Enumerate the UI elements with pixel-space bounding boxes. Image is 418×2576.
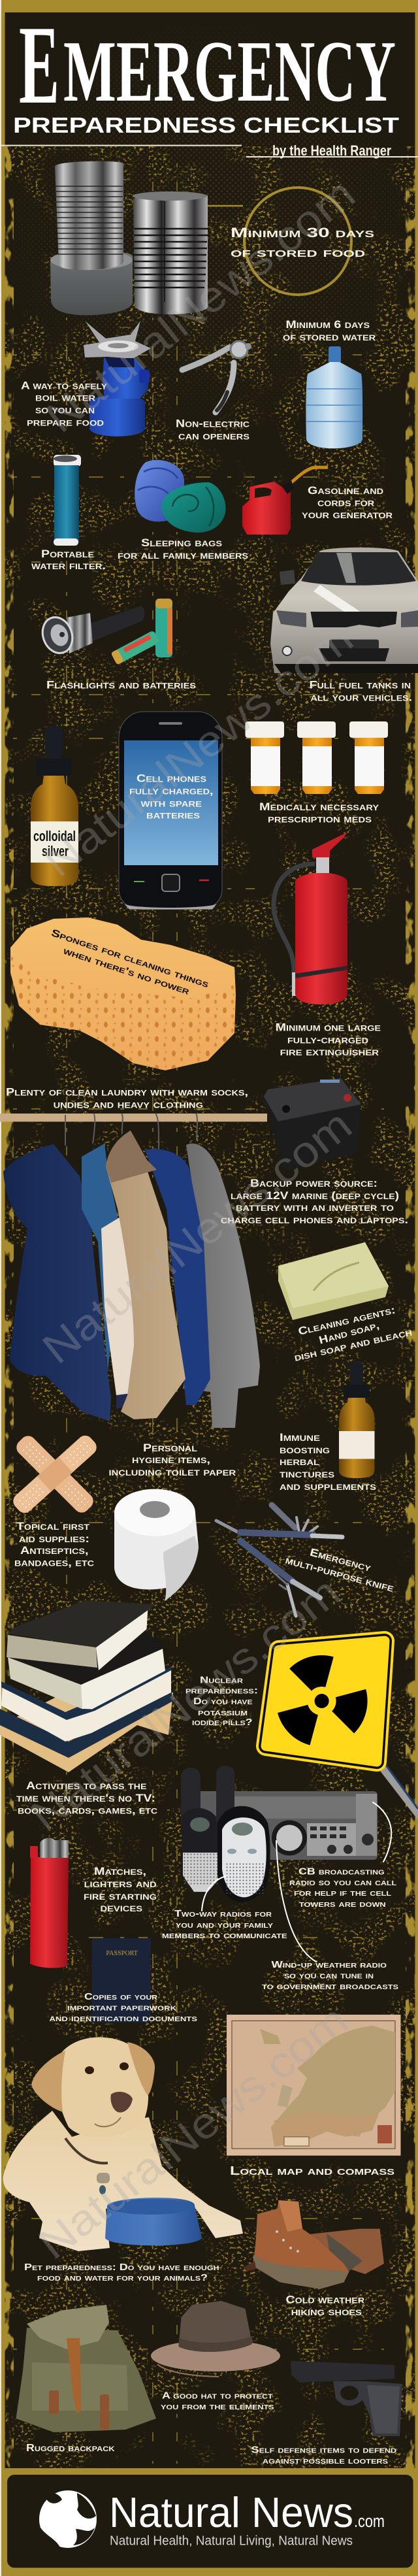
text: cleaning agents: dish soap and bleach xyxy=(293,1327,413,1364)
logo wordmark: .com xyxy=(354,2511,385,2531)
icon: can opener xyxy=(182,341,251,412)
subtitle: PREPAREDNESS CHECKLIST xyxy=(13,114,400,138)
text: wind-up radio: Wind-up weather radio xyxy=(272,1960,387,1970)
icon: sponge: when there's no power xyxy=(62,946,191,997)
text: prescription meds xyxy=(259,801,379,825)
title xyxy=(19,3,396,127)
text: multi-purpose knife: Emergency xyxy=(308,1546,372,1574)
icon: sponge xyxy=(10,917,236,1070)
text: sleeping bags: for all family members xyxy=(118,550,248,561)
icon: cell phone: fully charged, xyxy=(129,785,213,797)
arrow: radio callouts xyxy=(202,1802,391,1962)
text: hat xyxy=(161,2391,274,2412)
icon: car xyxy=(270,548,418,673)
watermark: NaturalNews.com xyxy=(37,169,364,442)
text: can openers: Non-electric xyxy=(176,418,249,430)
watermark: NaturalNews.com xyxy=(29,1995,357,2268)
text: first aid: Topical first xyxy=(16,1521,90,1532)
text: can openers: can openers xyxy=(178,431,249,442)
text: backpack: Rugged backpack xyxy=(26,2443,115,2454)
text: laundry xyxy=(6,1086,248,1110)
text: boil water xyxy=(21,380,107,429)
text: 6 days water: of stored water xyxy=(283,331,376,343)
text: pet preparedness: Pet preparedness: Do you have enough xyxy=(24,2262,219,2273)
byline: by the Health Ranger xyxy=(272,142,391,159)
text: two-way radios: Two-way radios for xyxy=(174,1909,272,1919)
text: fire extinguisher: Minimum one large xyxy=(276,1022,381,1034)
icon: bandages xyxy=(10,1432,100,1516)
text: matches: lighters and xyxy=(84,1878,157,1890)
text: multi-purpose knife: multi-purpose knife xyxy=(284,1554,395,1594)
text: immune xyxy=(280,1432,376,1493)
text: map and compass: Local map and compass xyxy=(230,2164,394,2177)
text: fuel tanks: all your vehicles. xyxy=(311,691,412,703)
text: wind-up radio xyxy=(262,1960,398,1992)
text: self defense: against possible looters xyxy=(263,2456,388,2466)
text: matches: devices xyxy=(101,1902,142,1914)
text: backup power: large 12V marine (deep cycle) xyxy=(231,1190,399,1202)
text: fuel tanks xyxy=(310,680,412,703)
icon: passport xyxy=(92,1938,151,2023)
icon: cell phone: with spare xyxy=(141,797,202,809)
text: hiking shoes xyxy=(286,2294,364,2318)
watermark: NaturalNews.com xyxy=(22,1567,349,1840)
text: nuclear xyxy=(185,1676,258,1728)
text: hat: you from the elements xyxy=(161,2402,274,2412)
icon: cell phone: Cell phones xyxy=(137,773,206,785)
text: cleaning agents xyxy=(293,1304,413,1364)
text: wind-up radio: so you can tune in xyxy=(284,1971,374,1981)
text: two-way radios: members to communicate xyxy=(162,1930,287,1941)
icon: cell phone: batteries xyxy=(146,810,200,821)
text: flashlights: Flashlights and batteries xyxy=(46,680,196,691)
icon: fire extinguisher xyxy=(274,833,347,1004)
text: CB radio: CB broadcasting xyxy=(298,1866,385,1877)
icon: dog with bowl xyxy=(3,2038,243,2251)
icon: batteries xyxy=(111,599,172,665)
icon: books xyxy=(0,1600,173,1772)
text: pet preparedness: food and water for your animals? xyxy=(37,2273,208,2283)
text: first aid xyxy=(14,1521,94,1569)
text: CB radio: radio so you can call xyxy=(289,1877,396,1888)
text: first aid: aid supplies: xyxy=(19,1533,89,1545)
icon: colloidal silver bottle: silver xyxy=(42,843,69,859)
text: activities xyxy=(16,1780,157,1817)
text: backup power: Backup power source: xyxy=(250,1178,378,1189)
text: documents: important paperwork xyxy=(67,2002,177,2013)
text: documents: Copies of your xyxy=(84,1992,158,2002)
text: hat: A good hat to protect xyxy=(162,2391,273,2402)
text: water filter: Portable xyxy=(41,548,94,560)
text: 6 days water xyxy=(283,319,376,343)
text: sleeping bags: Sleeping bags xyxy=(141,537,222,549)
text: hiking shoes: Cold weather xyxy=(286,2294,364,2305)
text: water filter: water filter. xyxy=(31,560,106,572)
text: hiking shoes: hiking shoes xyxy=(291,2306,362,2318)
text: 6 days water: Minimum 6 days xyxy=(286,319,370,331)
icon: map xyxy=(227,2015,401,2156)
icon: sleeping bags xyxy=(135,460,226,533)
text: 30 days food: of stored food xyxy=(231,244,365,260)
icon: CB radio xyxy=(195,1791,378,1860)
text: multi-purpose knife xyxy=(284,1546,395,1594)
text: immune: Immune xyxy=(280,1432,320,1444)
text: water filter xyxy=(31,548,106,572)
text: immune: boosting xyxy=(280,1444,330,1456)
text: two-way radios xyxy=(162,1909,287,1941)
icon: water filter xyxy=(54,455,81,546)
text: documents: and identification documents xyxy=(50,2013,197,2024)
icon: radiation sign xyxy=(266,1641,418,1820)
icon: two-way radios xyxy=(181,1766,270,1902)
text: prescription meds: Medically necessary xyxy=(259,801,379,813)
text: backup power: battery with an inverter to xyxy=(236,1202,394,1214)
text: nuclear: Nuclear xyxy=(200,1676,244,1686)
watermark: NaturalNews.com xyxy=(35,613,362,886)
text: fire extinguisher xyxy=(276,1022,381,1058)
text: 30 days food: Minimum 30 days xyxy=(231,225,374,240)
footer band xyxy=(1,2468,418,2576)
title: E xyxy=(19,3,59,127)
text: two-way radios: you and your family xyxy=(176,1920,273,1930)
icon: passport: PASSPORT xyxy=(106,1950,138,1957)
icon: water jug xyxy=(306,346,362,448)
text: fire extinguisher: fully-charged xyxy=(287,1034,368,1046)
text: documents xyxy=(50,1992,197,2024)
text: hygiene: hygiene items, xyxy=(132,1454,210,1466)
text: immune: and supplements xyxy=(280,1481,376,1493)
text: immune: herbal xyxy=(280,1456,319,1468)
text: boil water: boil water xyxy=(35,392,95,404)
icon: colloidal silver bottle xyxy=(31,725,78,886)
icon: coats on rack xyxy=(0,1114,267,1428)
text: hygiene xyxy=(108,1442,236,1478)
text: self defense: Self defense items to defend xyxy=(251,2445,396,2456)
text: nuclear: potassium xyxy=(198,1708,248,1718)
icon: lighter xyxy=(30,1838,69,1968)
icon: prescription bottles xyxy=(246,721,388,794)
text: matches: fire starting xyxy=(84,1891,157,1902)
text: activities: books, cards, games, etc xyxy=(18,1805,157,1817)
icon: tincture bottle xyxy=(339,1361,375,1478)
text: can openers xyxy=(176,418,249,442)
text: prescription meds: prescription meds xyxy=(268,813,372,825)
text: cleaning agents: Cleaning agents: xyxy=(297,1304,396,1338)
text: immune: tinctures xyxy=(280,1468,334,1480)
icon: camp stove xyxy=(84,321,151,437)
text: gasoline: Gasoline and xyxy=(308,485,383,497)
logo tagline: Natural Health, Natural Living, Natural News xyxy=(110,2534,353,2549)
text: CB radio: towers are down xyxy=(299,1899,386,1909)
icon: circle connector xyxy=(208,188,351,295)
watermark: NaturalNews.com xyxy=(33,1100,361,1373)
text: boil water: prepare food xyxy=(27,417,104,429)
text: 30 days food xyxy=(231,225,374,260)
icon: multi-tool xyxy=(216,1505,342,1616)
icon: hat xyxy=(151,2301,280,2377)
icon: hiking boots xyxy=(243,2200,384,2289)
text: activities: time when there's no TV: xyxy=(16,1792,155,1804)
icon: sponge: Sponges for cleaning things xyxy=(50,927,210,990)
text: matches: Matches, xyxy=(94,1866,146,1877)
icon: cell phone xyxy=(119,712,222,910)
text: backup power: charge cell phones and laptops. xyxy=(221,1214,408,1226)
text: backup power xyxy=(221,1178,408,1226)
text: first aid: bandages, etc xyxy=(14,1557,94,1569)
text: gasoline xyxy=(302,485,393,521)
icon: backpack xyxy=(16,2305,156,2432)
icon: food cans xyxy=(50,161,208,315)
icon: soap bar xyxy=(278,1242,389,1320)
text: laundry: Plenty of clean laundry with warm socks, xyxy=(6,1086,248,1098)
text: nuclear: iodide pills? xyxy=(192,1717,253,1728)
watermark xyxy=(22,169,364,2268)
text: cleaning agents: Hand soap, xyxy=(317,1319,381,1346)
logo wordmark: Natural News xyxy=(109,2488,353,2536)
text: pet preparedness xyxy=(24,2262,219,2283)
text: CB radio: for help if the cell xyxy=(294,1888,391,1898)
icon: gasoline can xyxy=(242,467,328,535)
icon: globe logo xyxy=(39,2490,97,2548)
text: wind-up radio: to government broadcasts xyxy=(262,1981,398,1992)
text: matches xyxy=(84,1866,157,1914)
text: sleeping bags xyxy=(118,537,248,561)
text: fuel tanks: Full fuel tanks in xyxy=(310,680,411,691)
text: boil water: A way to safely xyxy=(21,380,107,392)
text: self defense xyxy=(251,2445,396,2466)
text: nuclear: preparedness: xyxy=(185,1686,258,1696)
text: nuclear: Do you have xyxy=(193,1696,253,1707)
text: laundry: undies and heavy clothing xyxy=(54,1098,203,1110)
icon: pistol xyxy=(291,2361,402,2436)
icon: car battery xyxy=(264,1078,361,1170)
text: first aid: Antiseptics, xyxy=(20,1545,89,1557)
icon: flashlight xyxy=(38,606,145,657)
icon: toilet paper xyxy=(114,1489,199,1601)
text: boil water: so you can xyxy=(35,405,95,416)
text: fire extinguisher: fire extinguisher xyxy=(280,1046,379,1058)
text: activities: Activities to pass the xyxy=(26,1780,146,1792)
text: hygiene: including toilet paper xyxy=(108,1466,236,1478)
text: hygiene: Personal xyxy=(143,1442,197,1454)
text: gasoline: your generator xyxy=(302,509,393,521)
icon: colloidal silver bottle: colloidal xyxy=(33,828,76,844)
text: gasoline: cords for xyxy=(317,497,374,508)
text: CB radio xyxy=(289,1866,396,1909)
